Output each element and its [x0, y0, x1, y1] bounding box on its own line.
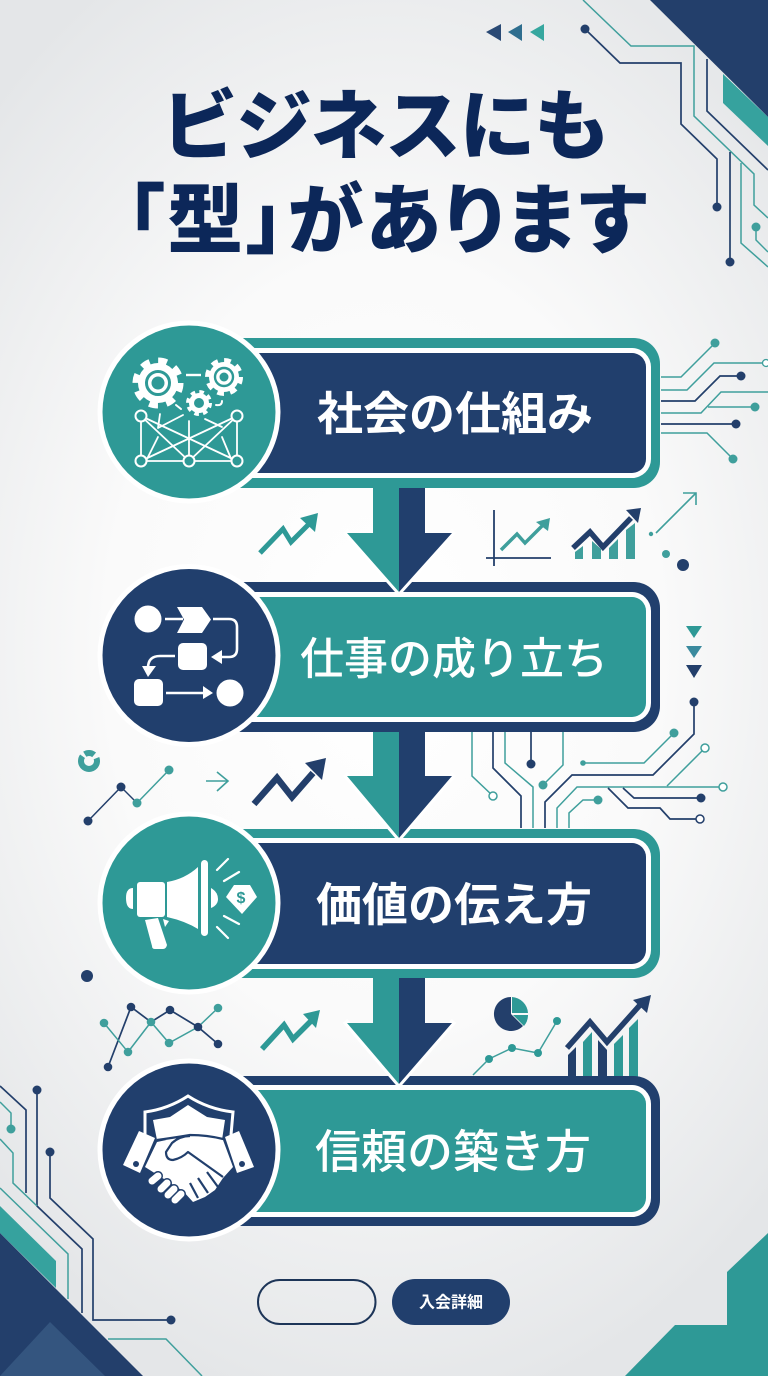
chart: rising bars with navy arrow: [573, 508, 641, 559]
card 2 label: 仕事の成り立ち: [300, 635, 608, 684]
arrow: card 2 to card 3: [345, 732, 454, 838]
small gear: [188, 392, 210, 414]
panel: card 1 社会の仕組み: [200, 338, 660, 488]
icon: workflow in navy circle: [98, 564, 280, 747]
corner decoration: bottom left: [0, 1086, 202, 1376]
icon: teal rising arrow after card 3: [262, 1010, 320, 1049]
icon: three down-pointing triangles: [686, 626, 702, 678]
icon: navy rising arrow: [254, 758, 326, 804]
shirt cuffs: [123, 1131, 254, 1173]
card 4 label: 信頼の築き方: [315, 1126, 591, 1178]
large gear: [136, 360, 180, 406]
icon: three left-pointing triangles: [486, 24, 544, 41]
corner decoration: bottom right: [625, 1233, 768, 1376]
icon: price tag diamond: [226, 885, 257, 914]
card 1 label: 社会の仕組み: [317, 388, 593, 440]
title: ビジネスにも: [162, 85, 608, 170]
empty outlined pill button: [258, 1280, 376, 1324]
icon: teal rising arrow after card 1: [260, 513, 318, 553]
title: 「型」があります: [126, 179, 650, 264]
arrow: card 1 to card 2: [345, 488, 454, 592]
panel: card 4 信頼の築き方: [200, 1076, 660, 1226]
card 3 label: 価値の伝え方: [316, 879, 592, 931]
shield: [145, 1096, 233, 1140]
arrow: card 3 to card 4: [345, 978, 454, 1084]
chart: network line graph: [100, 1003, 222, 1071]
panel: card 3 価値の伝え方: [200, 829, 660, 978]
corner decoration: top right: [580, 0, 768, 267]
chart: left node line: [84, 766, 174, 826]
icon: navy dot: [81, 970, 93, 982]
chart: pie: [494, 997, 528, 1031]
chart: bars with navy arrow above card 4: [567, 995, 651, 1077]
icon: thin teal arrow with dots: [649, 493, 696, 571]
panel: card 2 仕事の成り立ち: [200, 582, 660, 732]
button: 入会詳細: 入会詳細: [419, 1292, 483, 1312]
medium gear: [208, 360, 240, 394]
circuit lines: right of card 1: [661, 338, 768, 464]
icon: thin right arrow: [206, 772, 228, 791]
button: 入会詳細: [392, 1279, 510, 1325]
icon: gears and network in teal circle: [98, 320, 280, 504]
chart: small line chart with axes: [486, 510, 551, 566]
circuit lines: between card 2 and card 3: [472, 698, 727, 828]
icon: price tag diamond: $: [237, 890, 246, 907]
chart: right node line: [473, 1017, 561, 1075]
clasped hands: [145, 1135, 233, 1202]
icon: megaphone in teal circle: [98, 812, 280, 994]
icon: donut chart: [81, 753, 97, 769]
icon: handshake and shield in navy circle: [98, 1058, 280, 1242]
title: [126, 85, 650, 264]
network mesh: [136, 410, 242, 466]
